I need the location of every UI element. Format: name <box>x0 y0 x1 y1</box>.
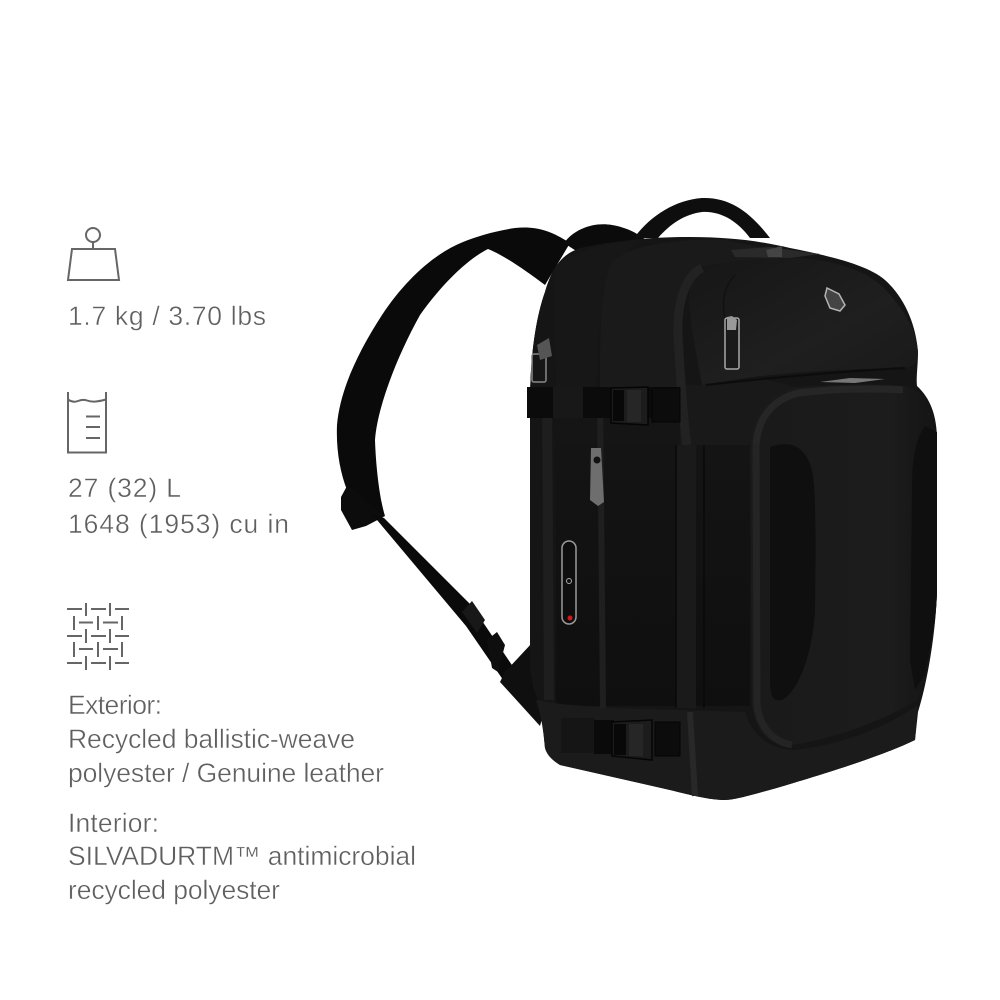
interior material text: SILVADURTM™ antimicrobial <box>68 841 416 871</box>
zip pullers <box>532 246 885 506</box>
icon: weight <box>68 228 119 280</box>
icon: volume beaker <box>68 392 106 452</box>
exterior material text: polyester / Genuine leather <box>68 758 384 788</box>
weight text: 1.7 kg / 3.70 lbs <box>68 301 266 331</box>
main body <box>530 237 937 800</box>
backpack illustration <box>337 198 937 800</box>
shield logo badge <box>825 288 845 311</box>
side pocket emblem <box>562 541 576 624</box>
exterior material text <box>68 690 384 788</box>
lower central column <box>556 443 750 706</box>
volume text: 1648 (1953) cu in <box>68 509 289 539</box>
front pocket <box>750 385 937 745</box>
side panel <box>530 247 585 700</box>
back shoulder pad <box>564 224 652 260</box>
exterior material text: Exterior: <box>68 690 162 720</box>
shoulder strap <box>337 228 570 726</box>
volume text: 27 (32) L <box>68 473 181 503</box>
interior material text: Interior: <box>68 808 159 838</box>
interior material text <box>68 808 416 905</box>
lower compression strap and buckle <box>561 718 680 760</box>
vertical seams <box>547 368 905 796</box>
carry handle <box>634 198 770 238</box>
top pocket <box>689 258 918 385</box>
front pocket inner panel <box>770 444 816 700</box>
upper compression strap and buckle <box>527 387 680 425</box>
base panel <box>536 700 918 800</box>
icon: woven material <box>67 603 129 670</box>
central upper panel <box>600 239 800 392</box>
volume text <box>68 473 289 539</box>
exterior material text: Recycled ballistic-weave <box>68 724 355 754</box>
interior material text: recycled polyester <box>68 875 280 905</box>
